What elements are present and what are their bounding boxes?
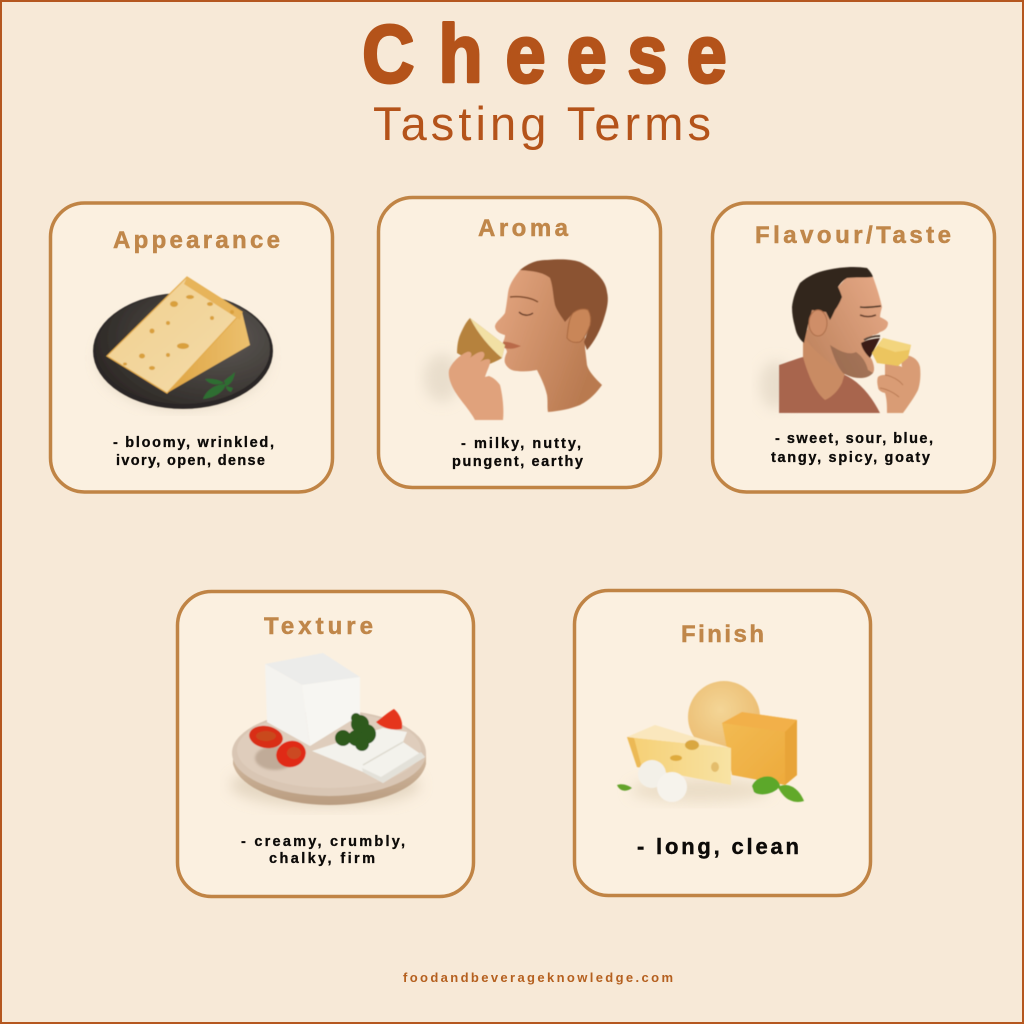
body text: appearance terms: - bloomy, wrinkled,: [113, 435, 274, 451]
feta slices: [312, 728, 425, 783]
icon: assorted cheeses with basil: [617, 681, 804, 802]
swiss wedge: [627, 737, 731, 785]
ear: [809, 310, 827, 336]
body text: texture terms: [241, 834, 405, 867]
panel: Finish: [574, 590, 870, 896]
icon: man biting cheese: [760, 267, 920, 413]
ear: [567, 309, 591, 342]
subtitle: Tasting Terms: Tasting Terms: [373, 97, 711, 150]
body text: appearance terms: ivory, open, dense: [116, 453, 265, 469]
body text: flavour terms: [771, 431, 933, 466]
body text: texture terms: - creamy, crumbly,: [241, 834, 405, 850]
body text: finish terms: - long, clean: [637, 834, 799, 859]
icon: feta on wooden board: [230, 653, 426, 807]
body text: flavour terms: - sweet, sour, blue,: [775, 431, 933, 447]
eyebrow: [510, 297, 538, 302]
face and neck: [495, 265, 602, 412]
heading: Appearance: Appearance: [113, 227, 280, 254]
body text: aroma terms: pungent, earthy: [452, 454, 583, 470]
parsley: [335, 713, 376, 751]
open mouth: [861, 338, 880, 358]
lips: [503, 342, 521, 349]
tomato wedges: [247, 709, 402, 771]
face: [806, 277, 888, 378]
footer website: foodandbeverageknowledge.com: [403, 970, 673, 985]
body text: texture terms: chalky, firm: [269, 851, 375, 867]
round cheese: [688, 681, 760, 753]
heading: Flavour/Taste: Flavour/Taste: [755, 222, 951, 249]
feta block: [265, 653, 360, 685]
hand: [449, 352, 503, 420]
closed eye: [519, 312, 533, 315]
heading: Aroma: Aroma: [478, 215, 569, 242]
icon: basil garnish: [203, 372, 235, 399]
shirt: [779, 357, 880, 413]
cheese piece: [457, 318, 505, 365]
neck: [803, 330, 845, 400]
hand: [877, 355, 920, 413]
mozzarella balls: [638, 760, 666, 788]
body text: aroma terms: [452, 436, 583, 470]
body text: appearance terms: [113, 435, 274, 469]
heading: Texture: Texture: [264, 613, 373, 640]
title: Cheese: Cheese: [362, 9, 727, 100]
panel: Aroma: [378, 198, 660, 488]
body text: flavour terms: tangy, spicy, goaty: [771, 450, 930, 466]
body text: aroma terms: - milky, nutty,: [461, 436, 581, 452]
icon: cheese wedge on dark plate: [93, 277, 273, 409]
panel: Appearance: [50, 203, 332, 492]
panel: Flavour/Taste: [712, 203, 994, 492]
stubble: [830, 345, 873, 378]
heading: Finish: Finish: [681, 621, 764, 648]
hair: [520, 259, 608, 350]
basil leaves: [752, 776, 780, 794]
icon: person smelling cheese: [424, 259, 608, 420]
cheese cube: [872, 338, 911, 366]
panel: Texture: [178, 592, 474, 896]
cheese block: [722, 712, 797, 785]
closed eye and brow: [860, 306, 881, 307]
hair: [792, 267, 873, 343]
